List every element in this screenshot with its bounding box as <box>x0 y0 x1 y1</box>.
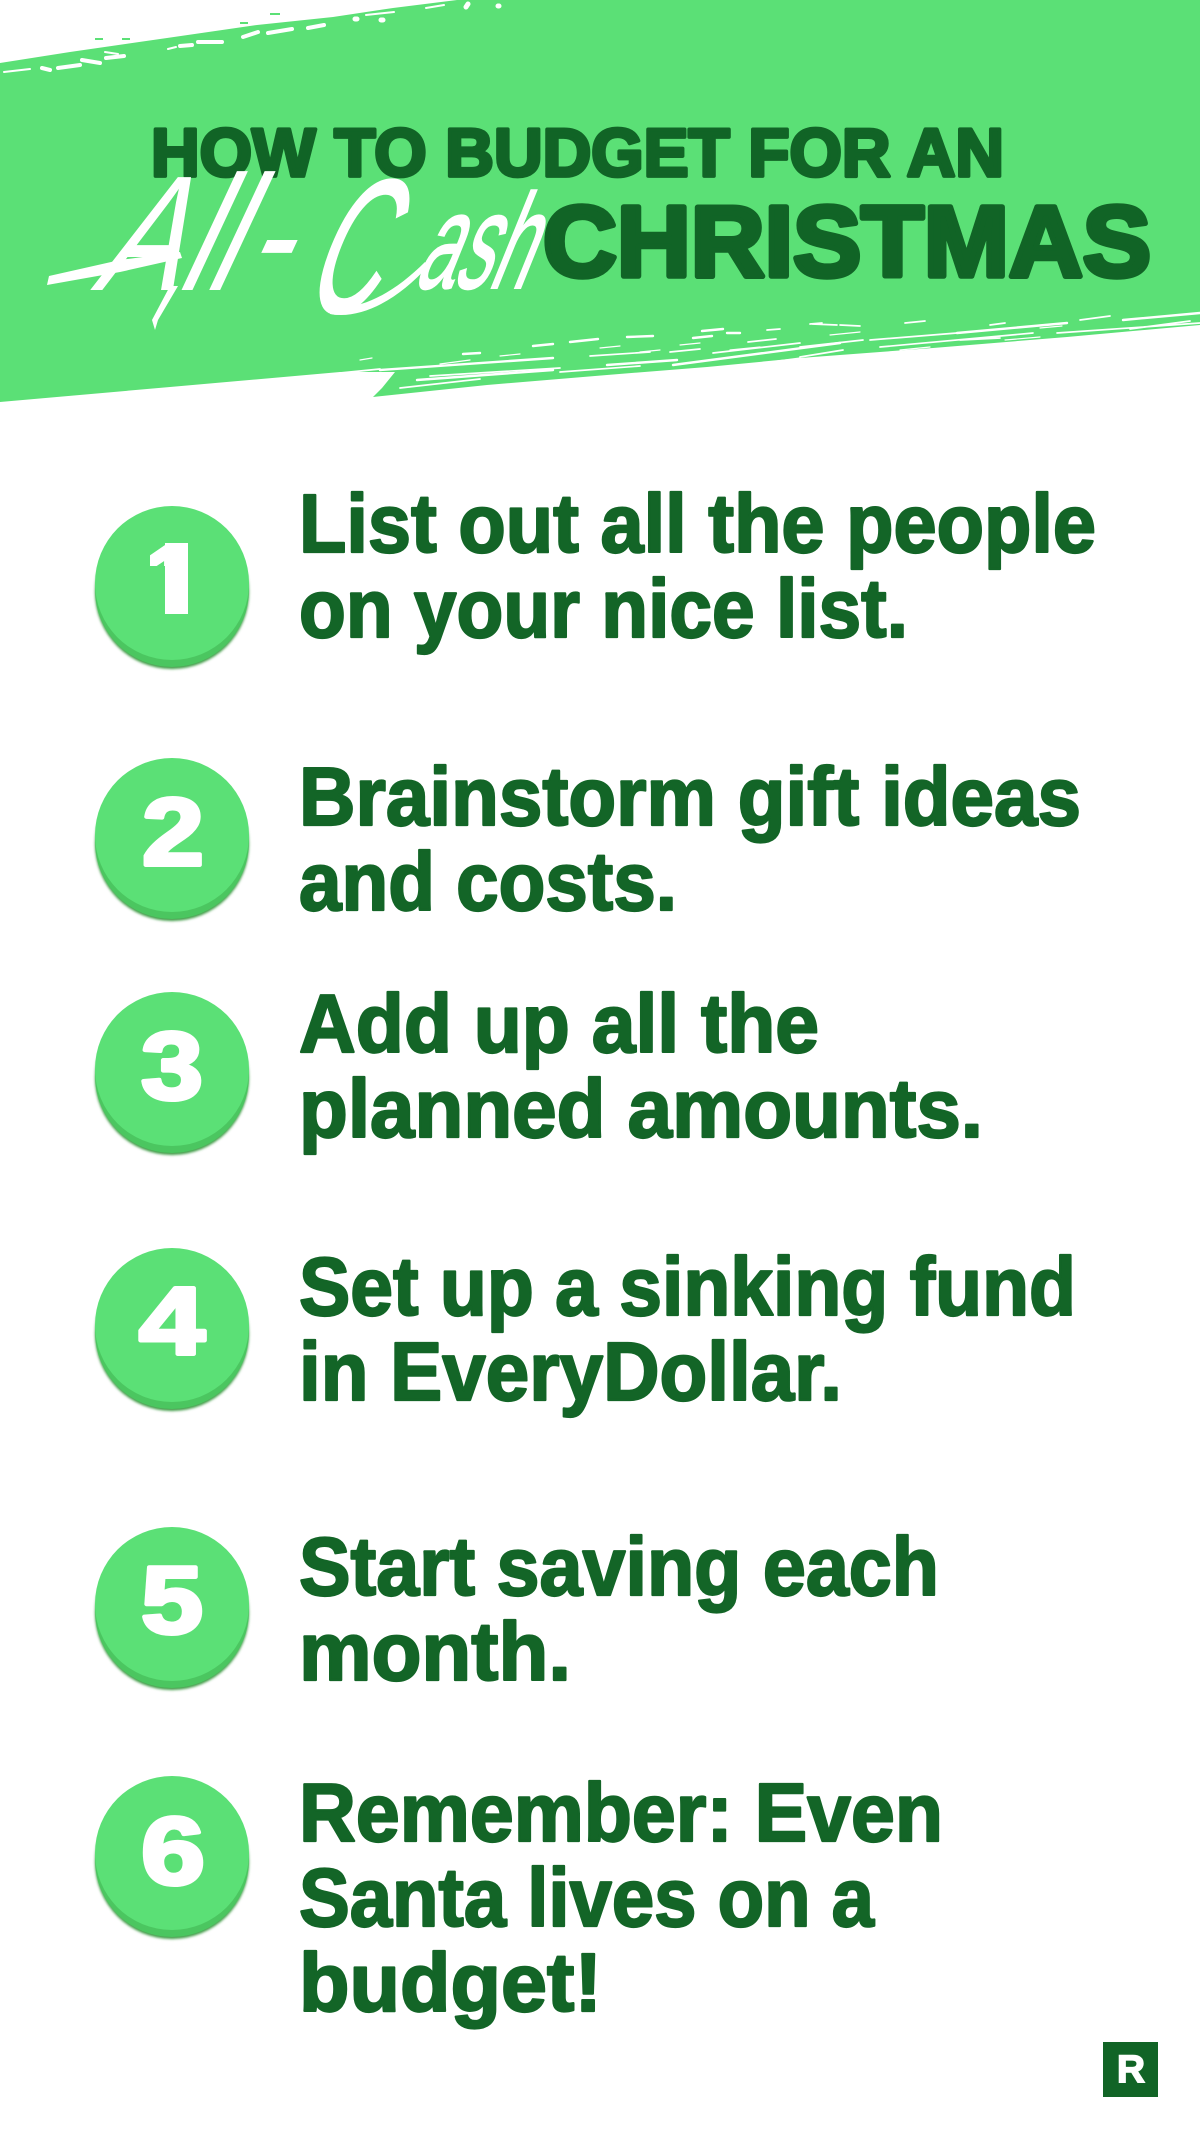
title word: christmas: CHRISTMAS <box>543 186 1151 298</box>
logo: R mark: R <box>1117 2048 1145 2091</box>
badge 4 <box>95 1248 249 1411</box>
logo: R mark <box>1103 2042 1158 2097</box>
step 2 text: and costs. <box>299 835 677 928</box>
badge 5: 5 <box>141 1547 203 1654</box>
step 1 text: on your nice list. <box>299 562 908 655</box>
badge 3: 3 <box>141 1013 203 1120</box>
step 4 <box>95 1240 1076 1418</box>
step 2 text: Brainstorm gift ideas <box>299 750 1081 843</box>
step 5 text: Start saving each <box>299 1520 939 1613</box>
step 6 text: Remember: Even <box>299 1766 943 1859</box>
badge 1 <box>95 506 249 669</box>
step 5 <box>95 1520 939 1698</box>
badge 4: 4 <box>139 1268 205 1375</box>
brush stroke background <box>0 0 1200 402</box>
badge 5 <box>95 1527 249 1690</box>
script title: all-cash <box>47 141 585 353</box>
badge 2 <box>95 758 249 921</box>
script title: all-cash: C <box>283 141 441 353</box>
title line 1: HOW TO BUDGET FOR AN <box>151 115 1004 191</box>
step 3 text: Add up all the <box>299 977 819 1070</box>
badge 3 <box>95 992 249 1155</box>
step 2 <box>95 750 1081 928</box>
badge 6: 6 <box>141 1798 205 1905</box>
step 5 text: month. <box>299 1605 571 1698</box>
step 6 text: Santa lives on a <box>299 1851 875 1944</box>
badge 2: 2 <box>142 779 204 886</box>
badge 1: 1 <box>145 526 195 633</box>
step 1 text: List out all the people <box>299 477 1096 570</box>
badge 6 <box>95 1776 249 1939</box>
step 1 <box>95 477 1096 669</box>
script title: all-cash: ash <box>400 168 574 318</box>
brush frayed edges <box>4 4 1200 388</box>
step 3 <box>95 977 983 1155</box>
step 6 <box>95 1766 943 2029</box>
step 3 text: planned amounts. <box>299 1062 983 1155</box>
script title: all-cash: All- <box>74 141 349 325</box>
step 4 text: in EveryDollar. <box>299 1325 842 1418</box>
step 4 text: Set up a sinking fund <box>299 1240 1076 1333</box>
step 6 text: budget! <box>299 1936 602 2029</box>
header: green brush banner <box>0 0 1200 402</box>
